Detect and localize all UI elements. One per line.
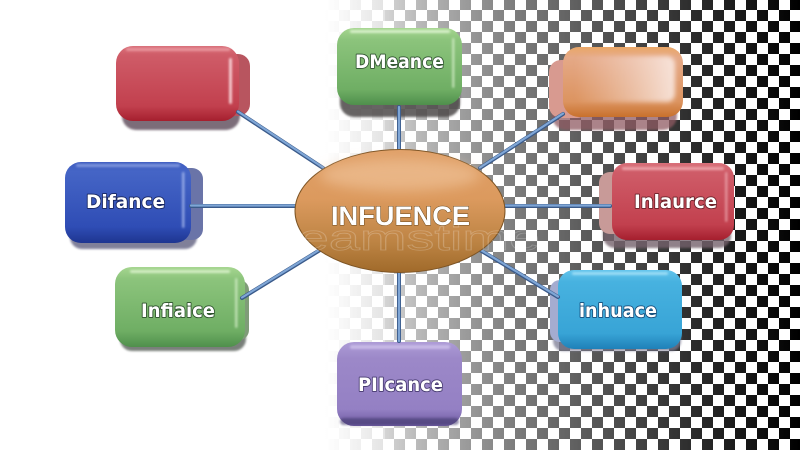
- checkerboard background: [325, 0, 800, 450]
- watermark: dreamstime: [248, 217, 540, 258]
- central hub: INFUENCE: [295, 150, 505, 272]
- node: orange blank (top right): [549, 47, 683, 130]
- label: PIIcance: PIIcance: [358, 374, 443, 396]
- node: Inlaurce (red right): [599, 163, 734, 248]
- label: Infiaice: Infiaice: [141, 300, 215, 322]
- node: Infiaice (green left): [115, 267, 249, 351]
- node: red blank (top left): [116, 46, 250, 130]
- label: Inlaurce: Inlaurce: [634, 191, 717, 213]
- node: Difance (blue): [65, 162, 203, 249]
- label: Difance: Difance: [86, 191, 165, 213]
- node: DMeance (green top): [337, 28, 462, 117]
- node: inhuace (cyan): [550, 270, 682, 351]
- label: inhuace: inhuace: [579, 300, 657, 322]
- label: DMeance: DMeance: [355, 51, 444, 73]
- hub label: INFUENCE: [331, 201, 470, 231]
- connector lines: [191, 107, 610, 341]
- node: PIIcance (purple): [337, 342, 462, 426]
